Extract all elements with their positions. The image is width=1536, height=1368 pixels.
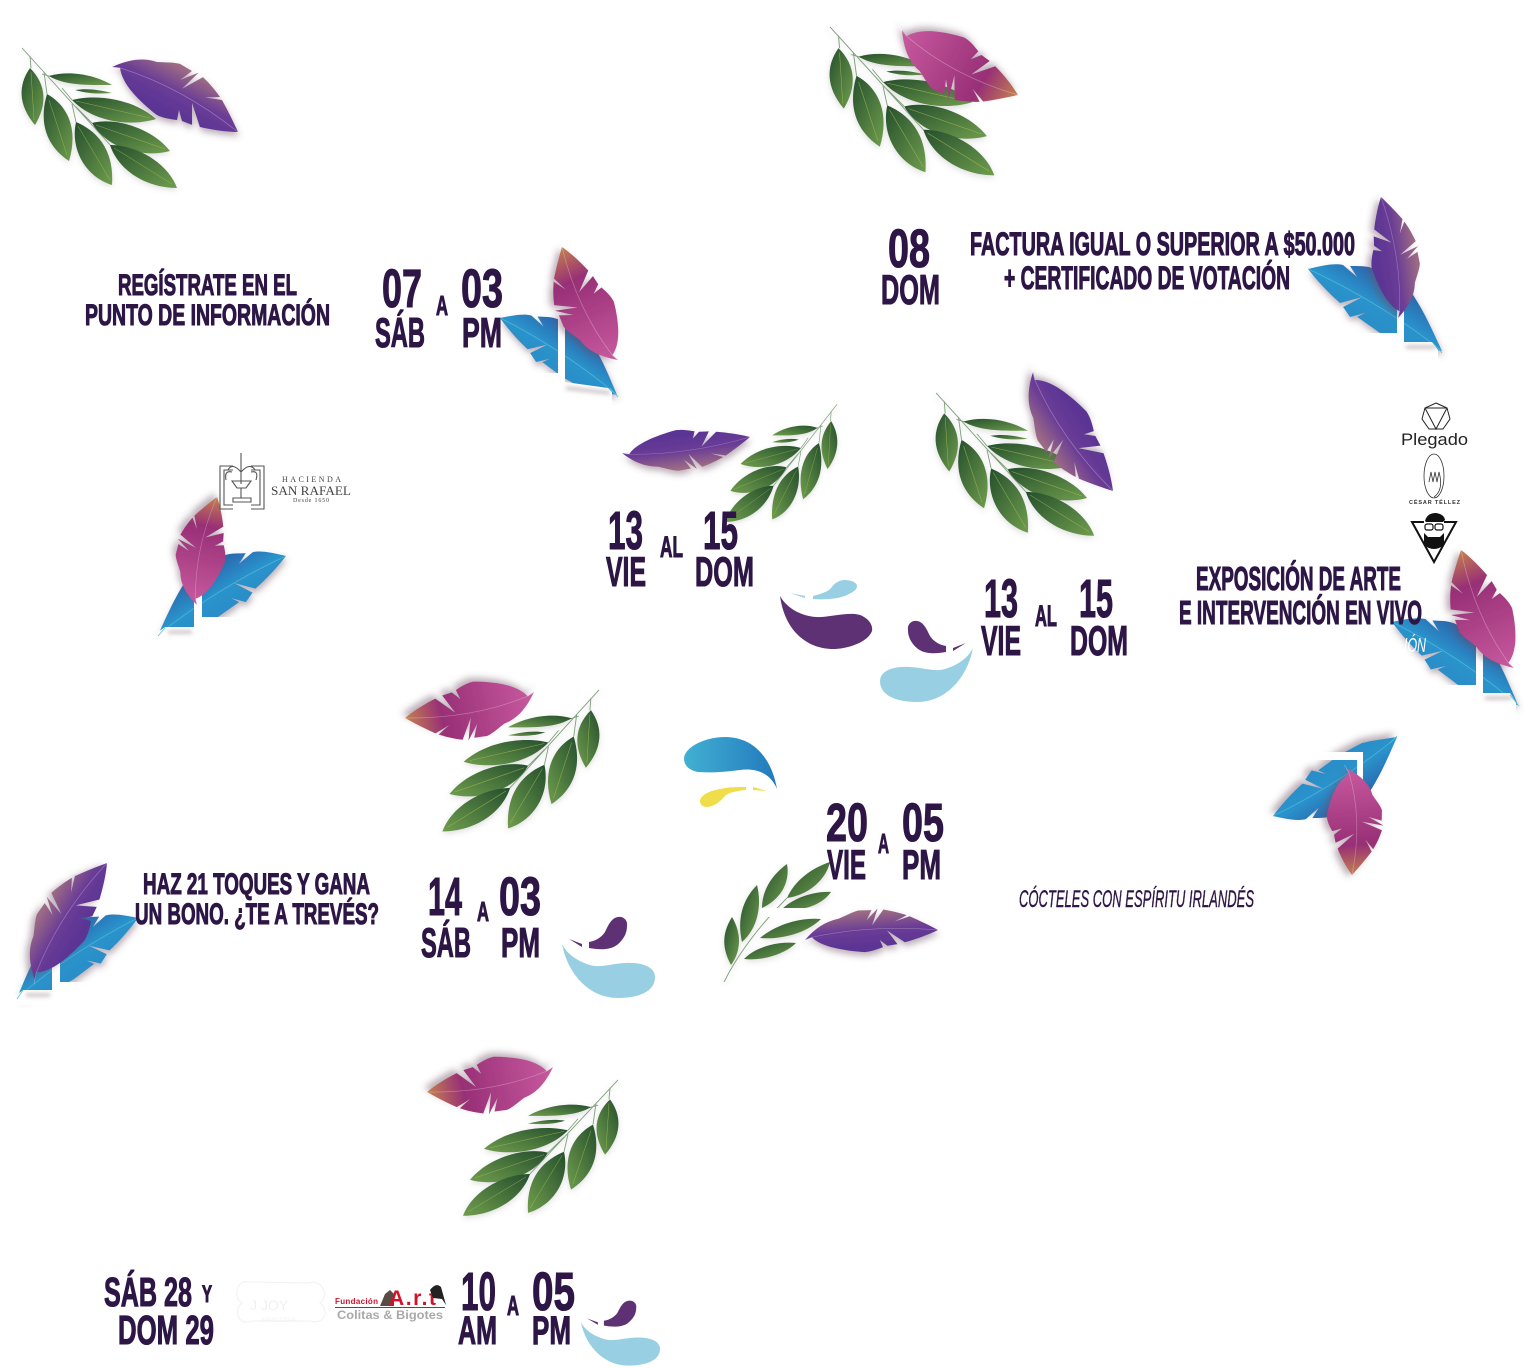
date: sáb 28 y dom 29: SÁB 28 [104, 1269, 192, 1315]
leaf group: blue and magenta feathers at right [1263, 722, 1415, 877]
date: 10 am a 05 pm: A [507, 1290, 519, 1321]
white text on blue feather: IÓN [1404, 634, 1426, 657]
text: Regístrate: PUNTO DE INFORMACIÓN [85, 298, 330, 332]
splash: purple and light blue [780, 580, 872, 649]
logo: Hacienda San Rafael: Desde 1650 [293, 498, 329, 504]
text: cócteles: CÓCTELES CON ESPÍRITU IRLANDÉS [1019, 886, 1254, 913]
splash: light blue and purple [880, 621, 973, 702]
text: haz 21 toques: HAZ 21 TOQUES Y GANA [143, 868, 370, 901]
leaf group: top left green sprig with purple feather [22, 34, 254, 188]
date: 08 dom: 08 [888, 219, 930, 279]
logo: J Joy Mascotas bone: MASCOTAS [262, 1318, 295, 1324]
leaf group: purple and blue feathers beside HAZ 21 TOQUES [0, 845, 148, 1013]
leaf group: purple and blue feathers beside 08 DOM [1298, 193, 1461, 367]
date: 14 sáb a 03 pm: 14 [428, 867, 462, 927]
date: 07 sáb a 03 pm: PM [462, 309, 502, 356]
date: 10 am a 05 pm: 05 [532, 1262, 575, 1322]
date: 07 sáb a 03 pm: SÁB [375, 309, 425, 356]
logo: Hacienda San Rafael [220, 453, 351, 509]
text: haz 21 toques [135, 868, 379, 931]
date: 14 sáb a 03 pm: A [477, 896, 489, 927]
date: 14 sáb a 03 pm: 03 [499, 867, 541, 927]
logo: J Joy Mascotas bone [237, 1282, 325, 1324]
date: 13 vie al 15 dom left: VIE [606, 548, 646, 595]
date: sáb 28 y dom 29: DOM 29 [118, 1307, 214, 1353]
text: factura [970, 226, 1355, 296]
logo: Fundación Art [335, 1285, 446, 1322]
splash: beside 14 SAB [562, 917, 655, 998]
text: Regístrate: REGÍSTRATE EN EL [118, 268, 297, 302]
date: sáb 28 y dom 29 [104, 1269, 214, 1353]
date: 13 vie al 15 dom right [981, 569, 1128, 664]
date: 13 vie al 15 dom right: DOM [1070, 617, 1128, 664]
date: 13 vie al 15 dom right: VIE [981, 617, 1021, 664]
date: 13 vie al 15 dom left [606, 501, 754, 595]
date: 20 vie a 05 pm: VIE [827, 841, 866, 888]
leaf group: sprig and magenta feather mid left [401, 670, 599, 831]
logo: Fundación Art: Colitas & Bigotes [337, 1310, 443, 1322]
date: 20 vie a 05 pm: 20 [826, 793, 868, 853]
date: 20 vie a 05 pm: 05 [902, 793, 944, 853]
text: exposición [1179, 560, 1422, 631]
text: Regístrate [85, 268, 330, 332]
date: sáb 28 y dom 29: Y [202, 1281, 212, 1308]
leaf group: sprig and purple feather over 13 al 15 [616, 404, 837, 522]
logo: bearded face in triangle [1412, 513, 1456, 562]
date: 13 vie al 15 dom left: AL [660, 531, 683, 564]
date: 08 dom [881, 219, 940, 313]
date: 07 sáb a 03 pm [375, 259, 503, 356]
date: 13 vie al 15 dom right: AL [1035, 600, 1057, 633]
date: 10 am a 05 pm: AM [458, 1309, 497, 1353]
splash: blue and yellow [684, 737, 777, 807]
date: 13 vie al 15 dom right: 13 [984, 569, 1018, 629]
leaf group: magenta and blue feathers under Hacienda logo [140, 491, 296, 650]
date: 07 sáb a 03 pm: A [436, 290, 448, 321]
leaf group: top center green sprig with magenta feather [830, 7, 1030, 175]
date: 20 vie a 05 pm: A [878, 828, 889, 859]
date: 13 vie al 15 dom right: 15 [1079, 569, 1113, 629]
date: 10 am a 05 pm [458, 1262, 575, 1353]
leaf group: blue and magenta feathers beside 07 SAB [491, 238, 640, 410]
leaf group: sprig and magenta feather lower left [423, 1045, 618, 1216]
logo: Fundación Art: Fundación [335, 1297, 378, 1306]
logo: Plegado [1401, 403, 1468, 449]
logo: Hacienda San Rafael: HACIENDA [282, 475, 341, 484]
date: 13 vie al 15 dom left: DOM [695, 548, 754, 595]
logo: César Téllez [1409, 454, 1461, 506]
date: 13 vie al 15 dom left: 15 [703, 501, 738, 561]
text: haz 21 toques: UN BONO. ¿TE A TREVÉS? [135, 897, 379, 931]
date: 20 vie a 05 pm: PM [902, 841, 941, 888]
logo: Plegado: Plegado [1401, 430, 1468, 449]
date: 14 sáb a 03 pm: PM [501, 919, 540, 966]
date: 07 sáb a 03 pm: 03 [461, 259, 503, 319]
logo: J Joy Mascotas bone: J JOY [250, 1297, 289, 1313]
logo: Hacienda San Rafael: SAN RAFAEL [271, 483, 351, 498]
date: 14 sáb a 03 pm [421, 867, 541, 966]
date: 08 dom: DOM [881, 266, 940, 313]
text: factura: + CERTIFICADO DE VOTACIÓN [1004, 260, 1290, 296]
leaf group: sprig and purple feather beside 20 VIE [724, 862, 939, 982]
date: 20 vie a 05 pm [826, 793, 944, 888]
splash: beside 10 AM [581, 1301, 660, 1366]
leaf group: blue and magenta feathers beside exposición [1382, 542, 1536, 720]
logo: César Téllez: CÉSAR TÉLLEZ [1409, 498, 1461, 506]
date: 07 sáb a 03 pm: 07 [382, 259, 422, 319]
logo: Fundación Art: A.r.t [389, 1287, 436, 1310]
date: 10 am a 05 pm: 10 [461, 1262, 496, 1322]
date: 14 sáb a 03 pm: SÁB [421, 919, 471, 966]
date: 10 am a 05 pm: PM [532, 1309, 571, 1353]
date: 13 vie al 15 dom left: 13 [608, 501, 643, 561]
leaf group: sprig and purple feather upper right [936, 356, 1132, 536]
